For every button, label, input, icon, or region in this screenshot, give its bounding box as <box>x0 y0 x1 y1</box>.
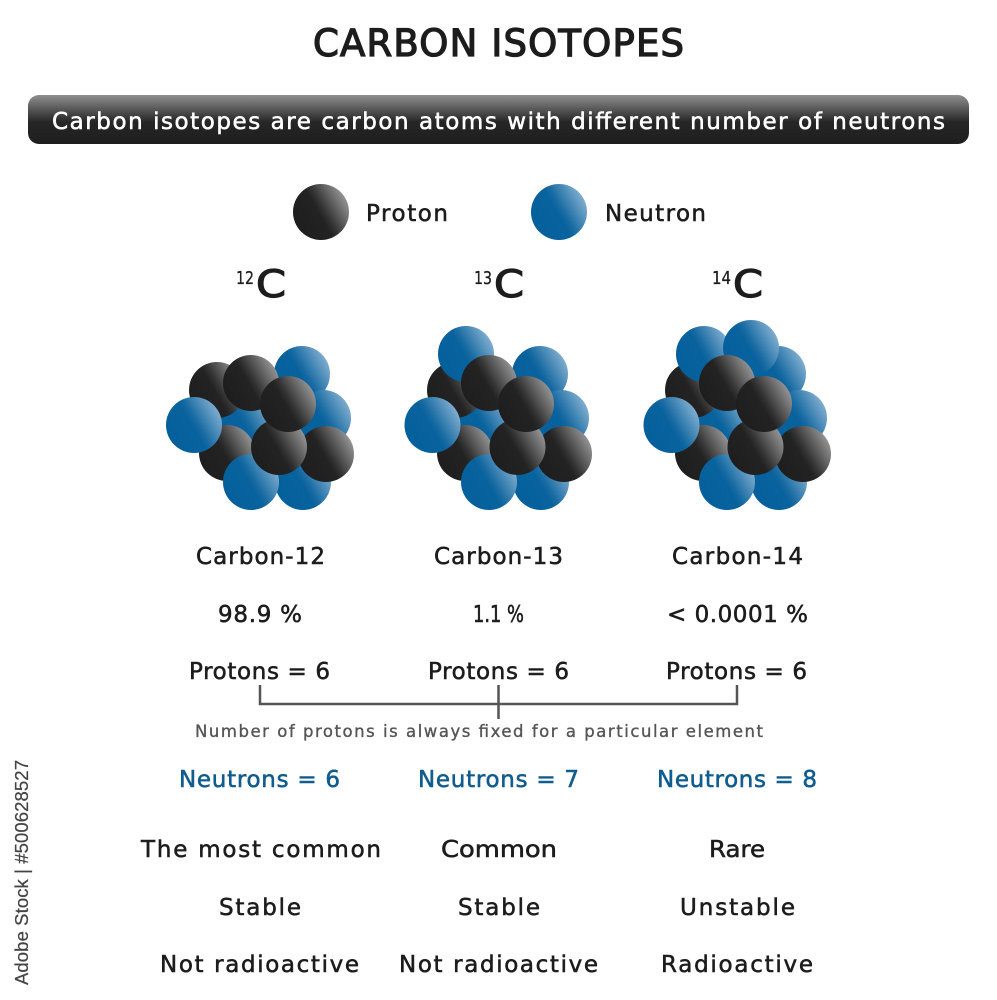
legend <box>293 184 706 240</box>
side credit: Adobe Stock | #500628527 <box>11 760 32 985</box>
neutrons row <box>179 767 817 793</box>
bracket connecting proton counts <box>260 685 737 719</box>
stability row: Unstable <box>680 895 795 921</box>
symbol: carbon-14: C <box>733 263 763 306</box>
stability row <box>219 895 795 921</box>
names row: Carbon-13 <box>434 544 563 570</box>
protons row: Protons = 6 <box>428 659 569 685</box>
symbol: carbon-14 <box>712 263 763 306</box>
names row: Carbon-12 <box>196 544 325 570</box>
abundance row <box>218 602 808 628</box>
names row: Carbon-14 <box>672 544 803 570</box>
title: CARBON ISOTOPES <box>313 22 684 65</box>
legend: proton: Proton <box>366 201 448 227</box>
radioactivity row <box>160 952 813 978</box>
definition banner: Carbon isotopes are carbon atoms with different number of neutrons <box>52 109 945 135</box>
radioactivity row: Not radioactive <box>399 952 598 978</box>
symbol: carbon-13: C <box>494 263 524 306</box>
commonness row: Rare <box>709 837 765 863</box>
nucleus: carbon-12 <box>166 346 354 510</box>
definition banner <box>28 95 969 144</box>
protons row: Protons = 6 <box>189 659 330 685</box>
names row <box>196 544 803 570</box>
symbol: carbon-12: 12 <box>236 269 254 289</box>
symbol: carbon-14: 14 <box>712 269 731 289</box>
commonness row: The most common <box>140 837 381 863</box>
symbol: carbon-12: C <box>256 263 286 306</box>
neutrons row: Neutrons = 7 <box>418 767 579 793</box>
protons row: Protons = 6 <box>666 659 807 685</box>
legend: neutron: Neutron <box>605 201 706 227</box>
radioactivity row: Not radioactive <box>160 952 359 978</box>
abundance row: 1.1 % <box>473 602 524 628</box>
radioactivity row: Radioactive <box>661 952 813 978</box>
legend: proton <box>293 184 448 240</box>
commonness row: Common <box>441 837 557 863</box>
symbol: carbon-13 <box>474 263 524 306</box>
abundance row: 98.9 % <box>218 602 302 628</box>
bracket note: Number of protons is always fixed for a particular element <box>195 722 764 741</box>
stability row: Stable <box>219 895 301 921</box>
symbol: carbon-13: 13 <box>474 269 492 289</box>
commonness row <box>140 837 765 863</box>
neutrons row: Neutrons = 6 <box>179 767 340 793</box>
protons row <box>189 659 807 685</box>
nucleus: carbon-14 <box>644 320 831 510</box>
legend: neutron <box>531 184 706 240</box>
abundance row: < 0.0001 % <box>667 602 808 628</box>
nucleus: carbon-13 <box>404 326 592 510</box>
symbol: carbon-12 <box>236 263 286 306</box>
neutrons row: Neutrons = 8 <box>657 767 817 793</box>
stability row: Stable <box>458 895 540 921</box>
